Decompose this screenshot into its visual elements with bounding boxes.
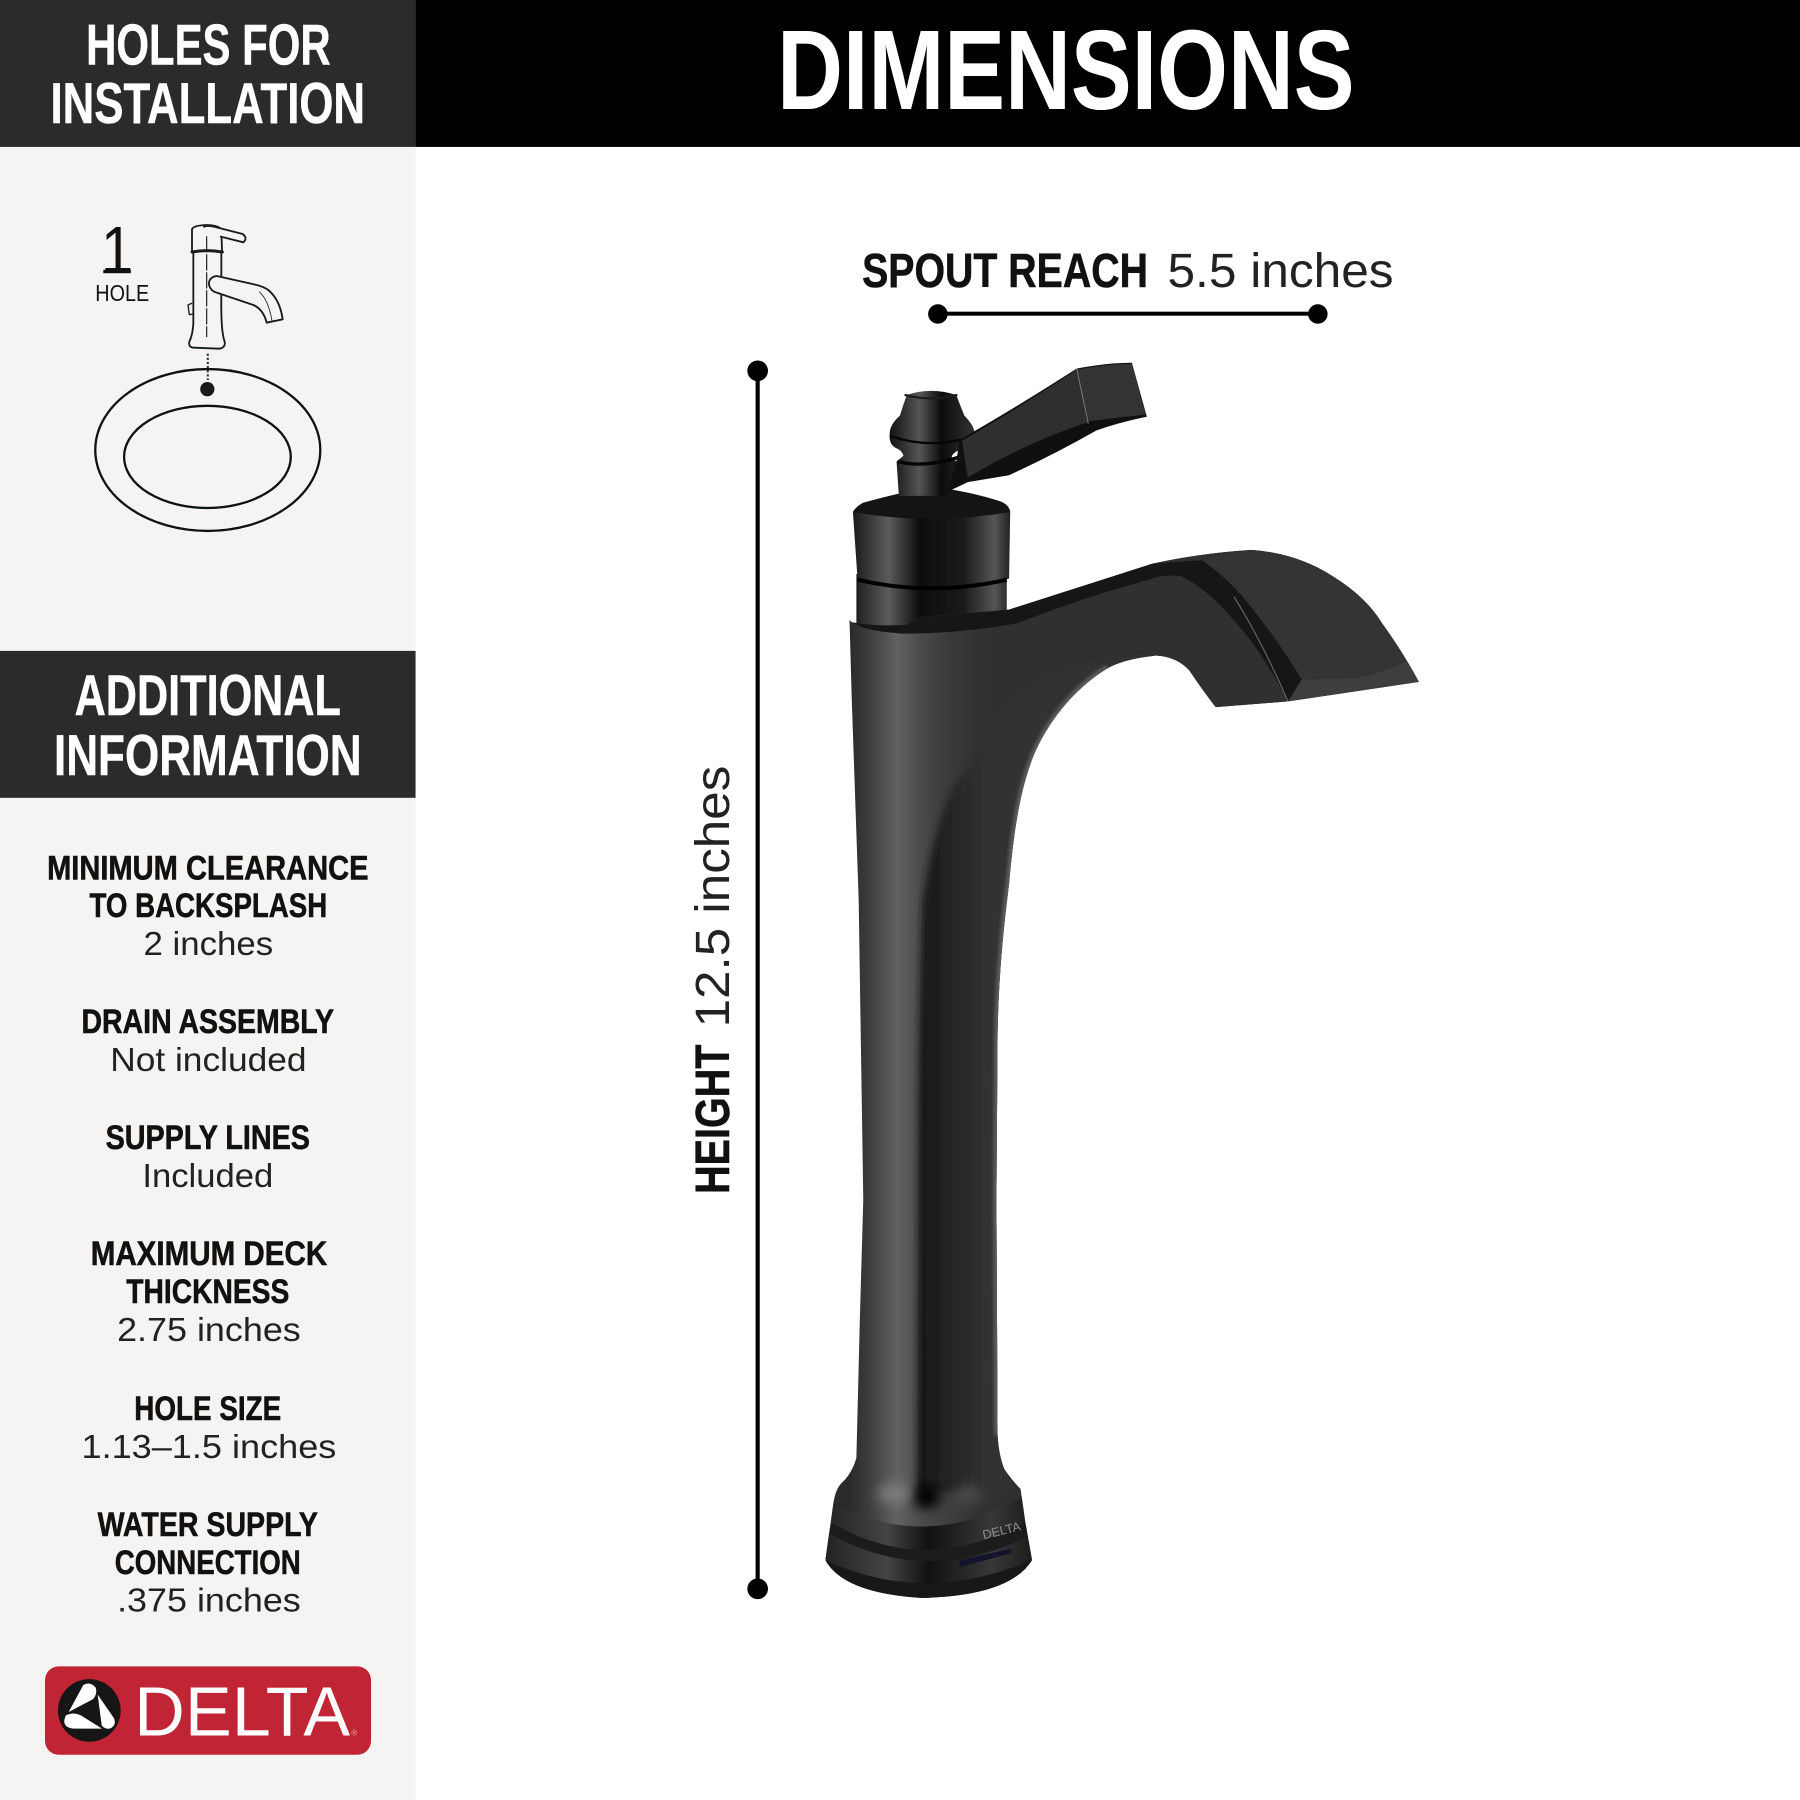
heading: holes for installation: INSTALLATION bbox=[51, 72, 365, 136]
text block: supply lines: SUPPLY LINES bbox=[106, 1119, 310, 1157]
base shoulder shading bbox=[913, 1485, 940, 1508]
heading: additional information: INFORMATION bbox=[54, 724, 362, 788]
faucet lever handle bbox=[948, 363, 1147, 491]
icon: mounting hole bbox=[200, 382, 214, 396]
text: hole count: 1 bbox=[101, 214, 133, 288]
dark inner arch panel bbox=[917, 655, 1159, 1492]
icon: sink basin bbox=[124, 406, 291, 508]
text block: hole size bbox=[82, 1390, 336, 1466]
product image: faucet bbox=[804, 363, 1435, 1607]
arrow: spout reach dimension line bbox=[928, 304, 1328, 324]
text: hole count bbox=[95, 214, 149, 306]
text block: minimum clearance: TO BACKSPLASH bbox=[90, 887, 327, 925]
icon: one hole faucet and sink diagram bbox=[95, 214, 320, 531]
logo: delta bbox=[45, 1666, 371, 1755]
text block: supply lines bbox=[106, 1119, 310, 1195]
text block: hole size: 1.13–1.5 inches bbox=[82, 1429, 336, 1466]
label: height: HEIGHT bbox=[686, 1045, 740, 1194]
label: spout reach: 5.5 inches bbox=[1167, 244, 1394, 298]
heading: holes for installation: HOLES FOR bbox=[86, 13, 331, 77]
text block: minimum clearance: 2 inches bbox=[143, 926, 273, 963]
text block: water supply connection: .375 inches bbox=[117, 1583, 301, 1620]
text block: supply lines: Included bbox=[142, 1158, 273, 1195]
heading: dimensions banner: DIMENSIONS bbox=[777, 7, 1355, 134]
icon: sink outer rim bbox=[95, 369, 320, 531]
label: spout reach: SPOUT REACH bbox=[862, 244, 1148, 298]
spout shading bbox=[1006, 550, 1419, 904]
spout end panel bbox=[1202, 550, 1419, 701]
label: height bbox=[686, 766, 740, 1194]
spout black band bbox=[852, 560, 1302, 701]
faucet finial knob bbox=[890, 391, 975, 496]
text block: water supply connection bbox=[98, 1506, 318, 1620]
logo: delta: DELTA bbox=[134, 1673, 350, 1751]
text block: minimum clearance: MINIMUM CLEARANCE bbox=[47, 849, 368, 887]
icon: line drawn faucet bbox=[188, 225, 283, 349]
text block: minimum clearance bbox=[47, 849, 368, 963]
arrow: height dimension line bbox=[747, 360, 768, 1599]
text block: maximum deck thickness: 2.75 inches bbox=[117, 1312, 301, 1349]
arch rim light bbox=[996, 668, 1108, 1435]
label: height: 12.5 inches bbox=[686, 766, 740, 1027]
faucet base bbox=[826, 1497, 1032, 1598]
heading: additional information: ADDITIONAL bbox=[75, 664, 341, 728]
sensor window bbox=[960, 1549, 1011, 1567]
text block: maximum deck thickness: THICKNESS bbox=[126, 1273, 289, 1311]
panel: sidebar background bbox=[0, 0, 416, 1800]
faucet body bbox=[815, 540, 1435, 1607]
text block: drain assembly: Not included bbox=[110, 1042, 307, 1079]
text block: maximum deck thickness: MAXIMUM DECK bbox=[91, 1235, 327, 1273]
logo: delta: ® bbox=[351, 1729, 357, 1738]
label: spout reach bbox=[862, 244, 1394, 298]
faucet handle base cylinder bbox=[853, 487, 1010, 638]
text block: maximum deck thickness bbox=[91, 1235, 327, 1349]
heading: holes for installation bbox=[0, 0, 416, 147]
text block: water supply connection: CONNECTION bbox=[115, 1544, 301, 1582]
base logo: DELTA bbox=[981, 1519, 1023, 1542]
text block: water supply connection: WATER SUPPLY bbox=[98, 1506, 318, 1544]
heading: additional information bbox=[0, 651, 416, 798]
spout lip bbox=[1288, 661, 1419, 701]
heading: dimensions banner bbox=[416, 0, 1800, 147]
arrow: dotted line to hole bbox=[207, 354, 209, 380]
text block: drain assembly: DRAIN ASSEMBLY bbox=[82, 1003, 334, 1041]
text: hole count: HOLE bbox=[95, 280, 149, 306]
text block: hole size: HOLE SIZE bbox=[134, 1390, 281, 1428]
text block: drain assembly bbox=[82, 1003, 334, 1079]
